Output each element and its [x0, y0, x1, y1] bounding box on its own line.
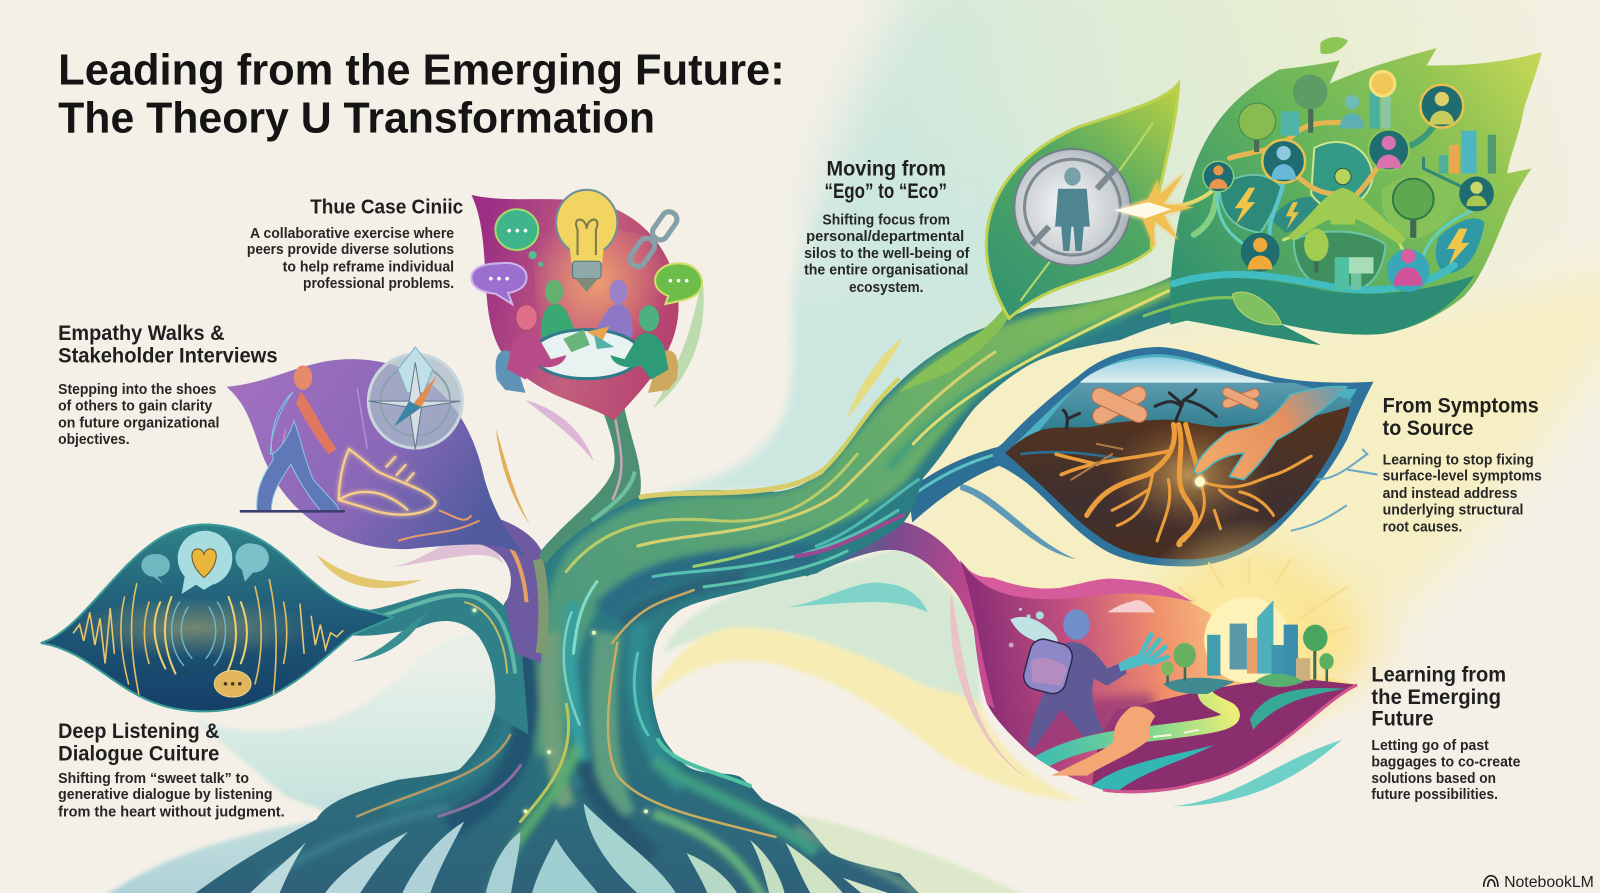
icon: hiker with backpack: [1021, 609, 1167, 750]
text block: From Symptoms to Source: [1383, 393, 1542, 536]
icon: glowing shoe: [339, 449, 436, 515]
icon: buildings: [1281, 92, 1496, 290]
text block: The Case Clinic: professional problems.: [303, 276, 454, 292]
icon: reaching hand: [1194, 387, 1347, 480]
trunk soft colour bands: [265, 278, 1179, 893]
title: [58, 46, 785, 143]
text block: Ego to Eco: ecosystem.: [849, 280, 923, 296]
trunk streaks: [357, 291, 1168, 837]
icon: winding road: [1034, 691, 1240, 766]
icon: spark: [1195, 477, 1205, 487]
leaf: Ego: [986, 84, 1179, 318]
trunk silhouette: [189, 276, 1184, 893]
right teal hill: [1250, 688, 1345, 730]
icon: trees: [1239, 75, 1434, 272]
text block: Ego to Eco: Moving from: [827, 157, 946, 181]
leaf: Deep Listening: [41, 525, 393, 711]
text block: Learning from the Emerging Future: baggages to co-create: [1371, 754, 1520, 770]
text block: From Symptoms to Source: underlying structural: [1383, 502, 1523, 518]
leaf: Eco: [1143, 37, 1542, 345]
text block: Empathy Walks: on future organizational: [58, 416, 219, 432]
icon: glowing roots: [1056, 418, 1311, 545]
burst of light: [1114, 173, 1194, 250]
text block: Ego to Eco: personal/departmental: [806, 229, 964, 245]
text block: The Case Clinic: peers provide diverse solutions: [247, 242, 454, 258]
text block: Ego to Eco: silos to the well-being of: [804, 246, 969, 262]
eco water streams: [1143, 114, 1477, 290]
icon: ground line: [240, 510, 345, 513]
trunk light sparks: [472, 608, 648, 813]
text block: Ego to Eco: the entire organisational: [804, 263, 968, 279]
icon: trees: [1161, 625, 1334, 684]
icon: sound waves: [71, 580, 343, 694]
text block: Ego to Eco: [804, 157, 969, 296]
landscape hill: [1092, 680, 1354, 794]
icon: gold chat button: [214, 671, 251, 697]
icon: walking person: [257, 365, 340, 511]
text block: Empathy Walks: Empathy Walks &: [58, 321, 224, 345]
text block: From Symptoms to Source: Learning to stop fixing: [1383, 452, 1534, 468]
decorative swooshes: [316, 276, 1342, 806]
text block: Learning from the Emerging Future: future possibilities.: [1371, 787, 1498, 803]
text block: Learning from the Emerging Future: solutions based on: [1371, 771, 1496, 787]
icon: lightning bolts: [1235, 188, 1469, 265]
NotebookLM mark: NotebookLM: [1504, 874, 1594, 891]
text block: Learning from the Emerging Future: [1371, 663, 1520, 803]
text block: From Symptoms to Source: root causes.: [1383, 520, 1462, 536]
leaf: Learning from the Emerging Future: [960, 517, 1369, 806]
text block: Empathy Walks: objectives.: [58, 432, 130, 448]
text block: Deep Listening: Dialogue Cuiture: [58, 741, 219, 765]
text block: From Symptoms to Source: From Symptoms: [1383, 393, 1539, 417]
leaf interior clipped scene: [1032, 680, 1354, 794]
text block: Deep Listening: from the heart without judgment.: [58, 804, 285, 820]
eco cells: [1219, 142, 1485, 291]
icon: lower reaching hand: [1051, 706, 1155, 776]
icon: sun: [1370, 71, 1395, 96]
text block: The Case Clinic: to help reframe individual: [283, 259, 454, 275]
icon: compass: [368, 347, 462, 449]
leaf: The Case Clinic: [471, 190, 702, 420]
future-leaf stem: [806, 519, 1005, 663]
text block: Learning from the Emerging Future: Future: [1371, 707, 1434, 731]
text block: Learning from the Emerging Future: the Emerging: [1371, 685, 1501, 709]
text block: Empathy Walks: of others to gain clarity: [58, 398, 213, 414]
leaf: Empathy Walks: [227, 347, 526, 556]
listening stem: [347, 589, 529, 735]
icon: dead tree: [1063, 390, 1216, 429]
icon: bandages: [1089, 383, 1261, 427]
text block: Empathy Walks: Stakeholder Interviews: [58, 343, 278, 367]
text block: Ego to Eco: “Ego” to “Eco”: [824, 179, 947, 203]
text block: Deep Listening: Shifting from “sweet talk” to: [58, 771, 249, 787]
text block: The Case Clinic: [247, 196, 463, 292]
text block: Learning from the Emerging Future: Learning from: [1371, 663, 1506, 687]
text block: Empathy Walks: Stepping into the shoes: [58, 382, 216, 398]
text block: From Symptoms to Source: surface-level symptoms: [1383, 469, 1542, 485]
text block: Empathy Walks: [58, 321, 278, 448]
text block: From Symptoms to Source: and instead address: [1383, 486, 1517, 502]
text block: Deep Listening: [58, 719, 285, 820]
icon: sun disc: [1204, 597, 1290, 683]
text block: The Case Clinic: Thue Case Ciniic: [310, 196, 463, 218]
icon: light bulb: [556, 190, 617, 292]
text block: The Case Clinic: A collaborative exercise where: [250, 226, 454, 242]
title: The Theory U Transformation: [58, 94, 655, 143]
icon: city: [1163, 600, 1310, 694]
icon: dust of past baggage: [1009, 608, 1058, 648]
icon: broken chain link: [627, 209, 680, 269]
icon: people at round table: [496, 280, 678, 393]
text block: Learning from the Emerging Future: Letting go of past: [1371, 738, 1489, 754]
gaps between roots: [245, 803, 903, 893]
icon: ego circle with person: [1014, 149, 1131, 265]
tree: roots and trunk: [189, 276, 1184, 893]
title: Leading from the Emerging Future:: [58, 46, 785, 95]
case clinic stem: [539, 408, 641, 563]
empathy stem: [464, 510, 544, 663]
text block: Deep Listening: generative dialogue by listening: [58, 787, 272, 803]
icon: network people: [1203, 85, 1494, 292]
icon: heart bubble: [141, 531, 269, 594]
text block: From Symptoms to Source: to Source: [1383, 416, 1474, 440]
icon: cloud: [1107, 600, 1155, 612]
text block: Deep Listening: Deep Listening &: [58, 719, 219, 743]
text block: Ego to Eco: Shifting focus from: [822, 213, 950, 229]
leaf: From Symptoms to Source: [993, 347, 1378, 566]
symptom stem: [908, 445, 1012, 523]
icon: speech bubbles: [471, 209, 702, 304]
icon: small leaf on stem: [1143, 292, 1282, 325]
water band: [1092, 745, 1214, 793]
ego stem: [898, 296, 1020, 393]
